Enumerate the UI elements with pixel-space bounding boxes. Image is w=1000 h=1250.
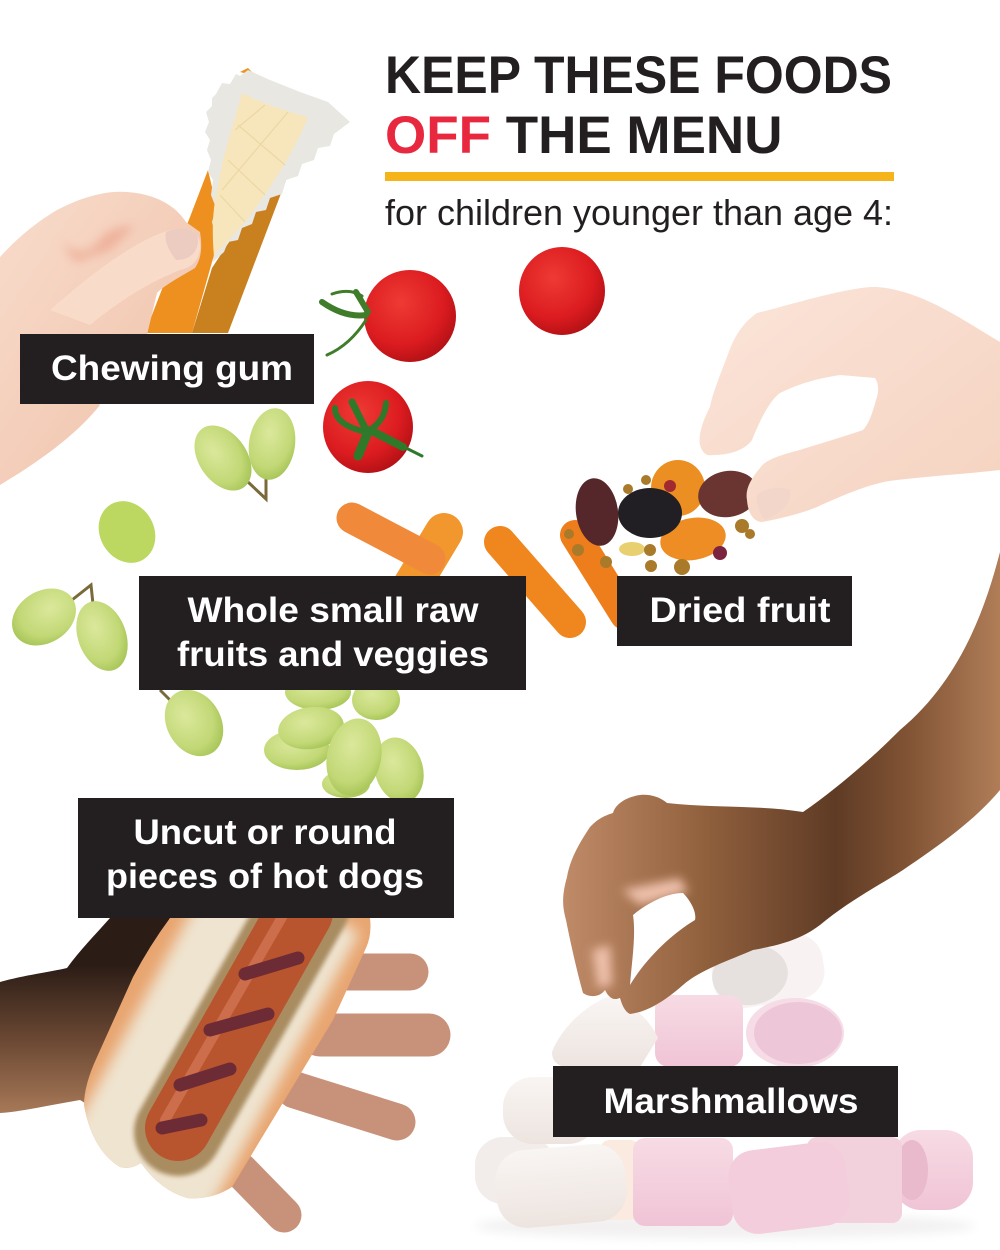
label: marshmallows: Marshmallows — [604, 1082, 858, 1121]
illustration: arm and hand with marshmallow — [563, 552, 1000, 1014]
illustration: dried fruit — [564, 460, 762, 575]
label: chewing gum — [20, 334, 314, 404]
label: dried fruit: Dried fruit — [650, 591, 831, 630]
illustration: chewing gum — [145, 68, 350, 333]
label: dried fruit — [617, 576, 852, 646]
label: chewing gum: Chewing gum — [51, 349, 293, 388]
label: uncut or round pieces of hot dogs: pieces of hot dogs — [106, 857, 424, 896]
icon: thumbnail — [757, 488, 790, 520]
illustration: hand holding gum — [0, 192, 201, 485]
subtitle: for children younger than age 4: — [385, 192, 893, 233]
label: marshmallows — [553, 1066, 898, 1137]
illustration: baby carrots — [352, 518, 625, 622]
gap between fingers — [630, 893, 695, 985]
illustration: hand picking dried fruit — [700, 287, 1000, 522]
illustration: hand holding hot dog — [0, 918, 429, 1215]
label: whole small raw fruits and veggies: fruits and veggies — [177, 635, 489, 674]
title: OFF THE MENU — [385, 106, 782, 165]
illustration: marshmallows — [475, 930, 975, 1238]
illustration: grapes — [1, 405, 431, 808]
illustration: tomatoes — [322, 247, 605, 473]
label: uncut or round pieces of hot dogs — [78, 798, 454, 918]
title underline — [385, 172, 894, 181]
title: KEEP THESE FOODS — [385, 46, 892, 105]
label: whole small raw fruits and veggies: Whole small raw — [188, 591, 479, 630]
icon: thumbnail — [165, 229, 198, 260]
illustration: hot dog — [84, 918, 370, 1198]
label: uncut or round pieces of hot dogs: Uncut or round — [134, 813, 396, 852]
label: whole small raw fruits and veggies — [139, 576, 526, 690]
title — [385, 46, 892, 165]
